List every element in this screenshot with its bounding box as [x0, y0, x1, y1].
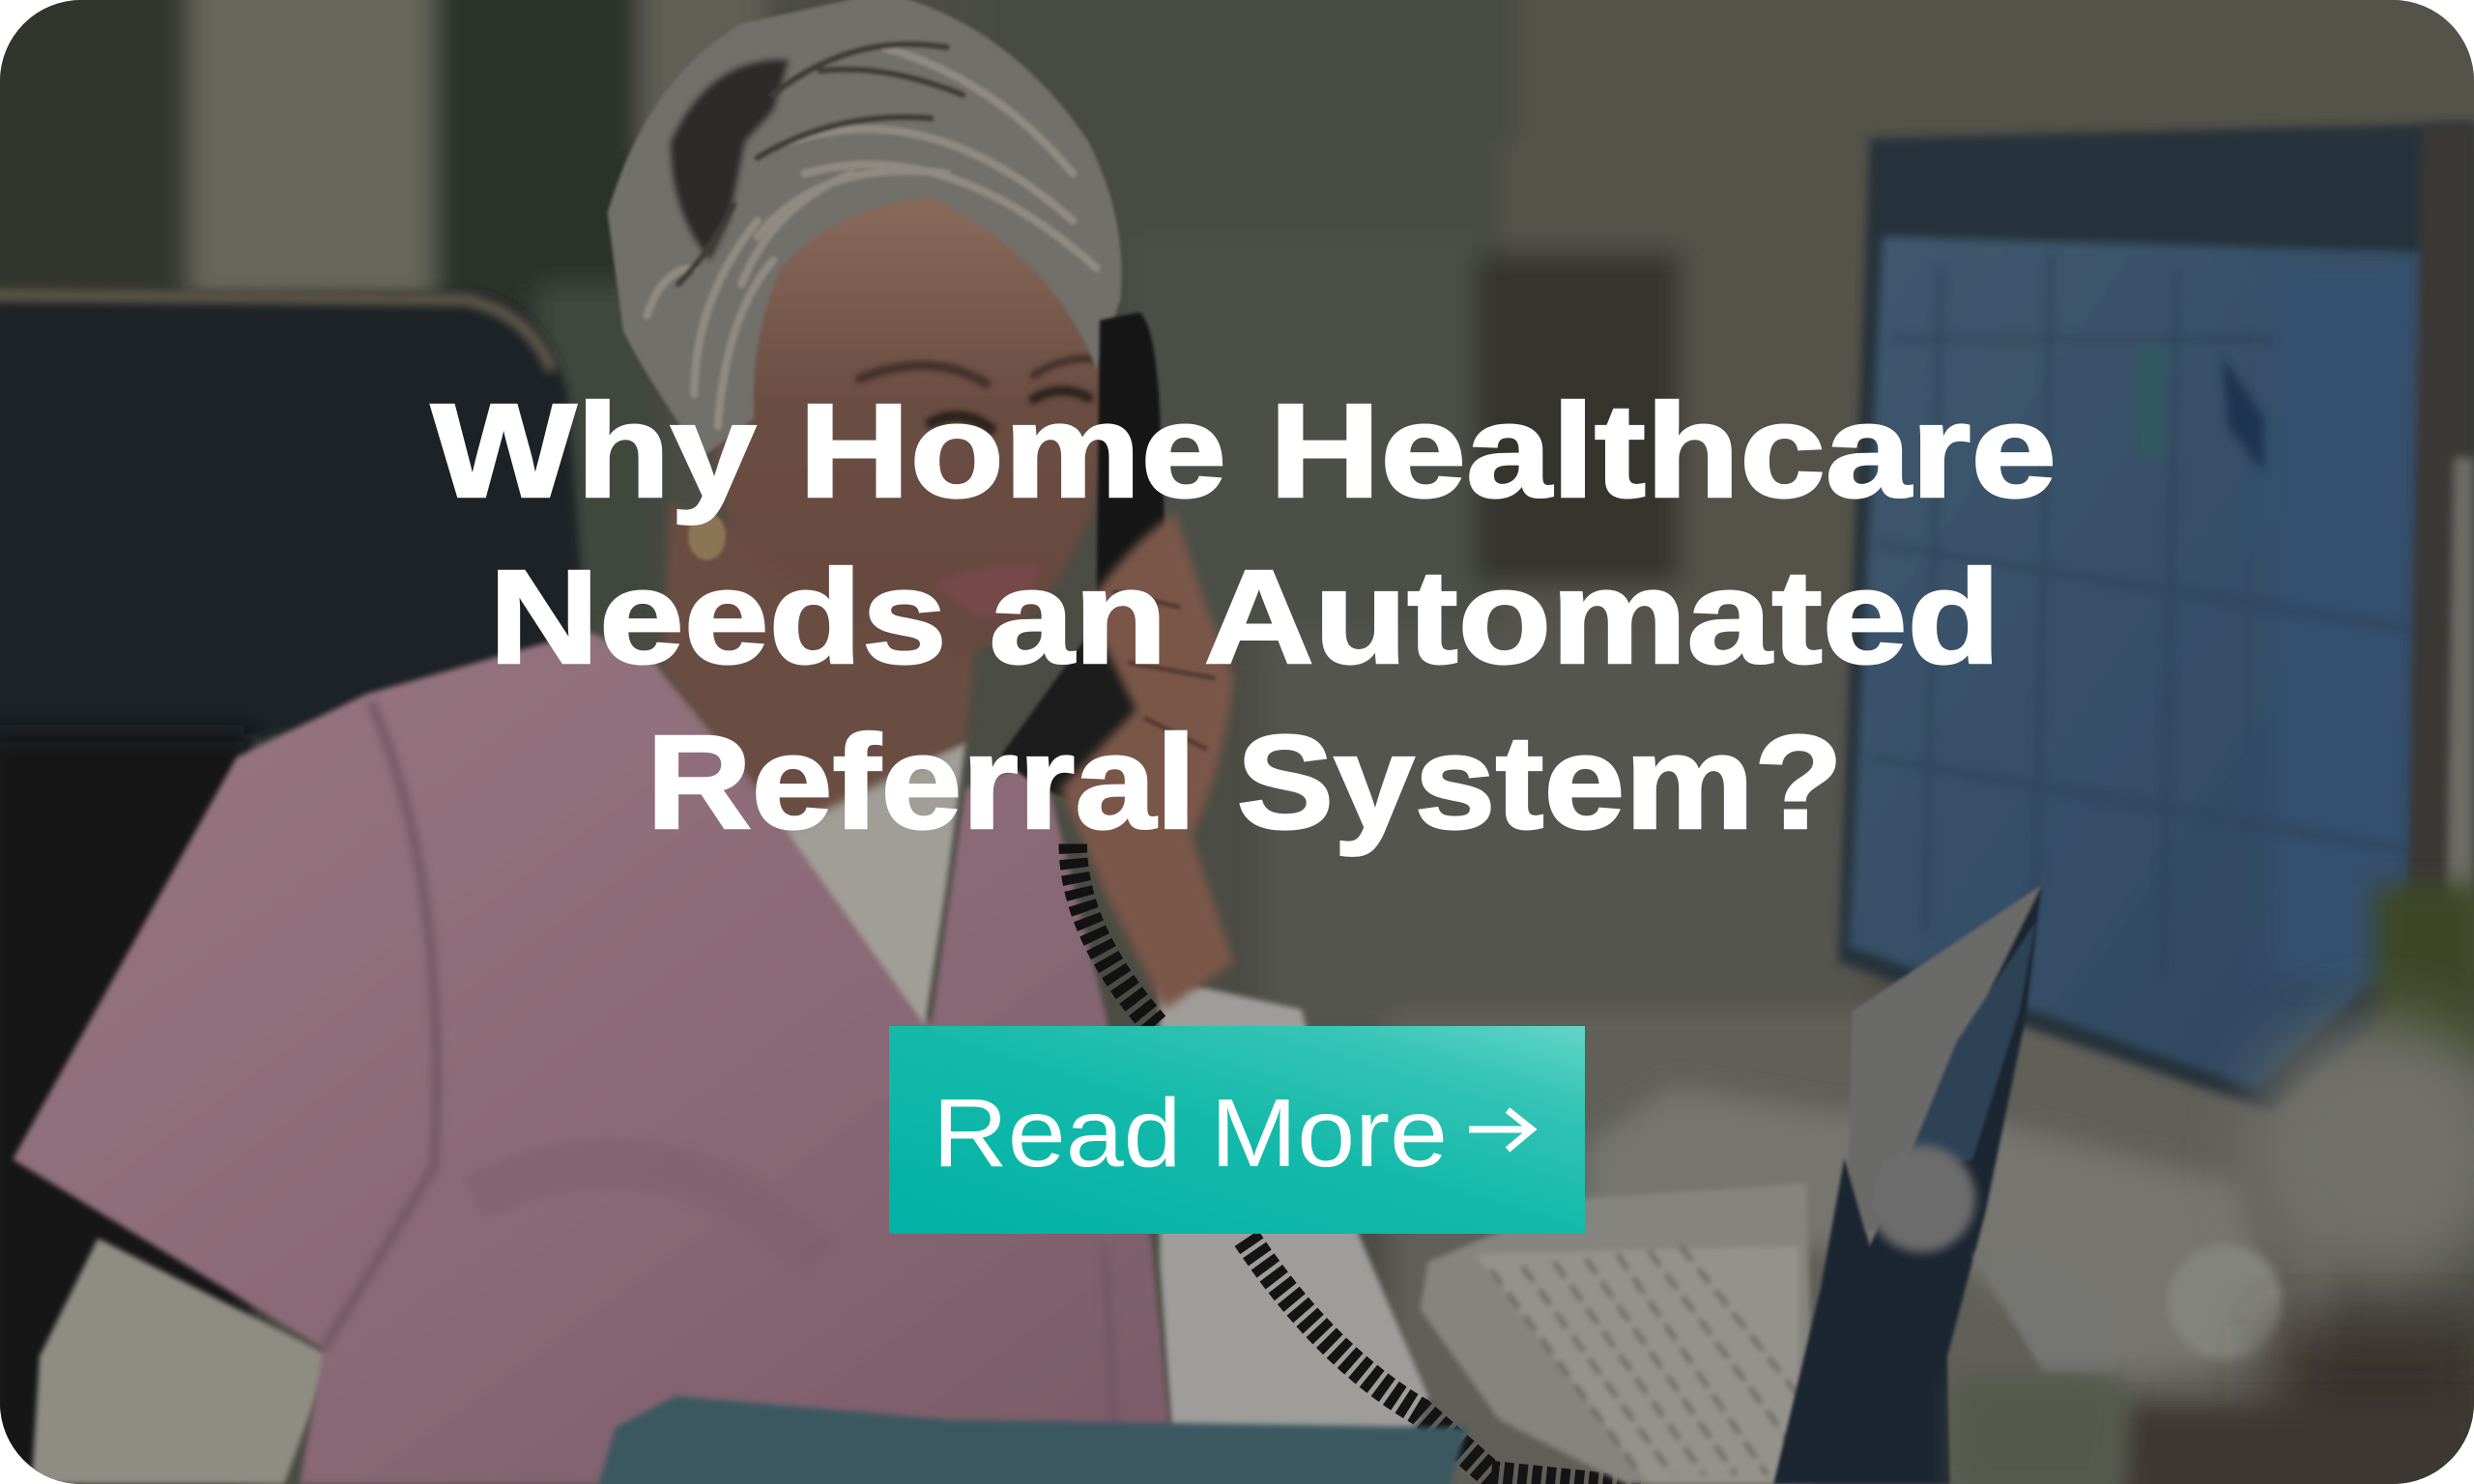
button: read more — [889, 1026, 1585, 1234]
keyboard — [1420, 1184, 1815, 1484]
nurse: hair — [608, 0, 1122, 457]
laptop — [1773, 885, 2042, 1484]
nurse: neck — [663, 504, 978, 828]
title — [431, 377, 2057, 857]
telephone handset — [1002, 312, 1175, 805]
nurse: white sleeve right — [1156, 985, 1430, 1430]
scrubs shading — [322, 699, 1107, 1349]
title: Referral System? — [647, 708, 1843, 857]
office chair — [0, 294, 587, 1484]
coiled phone cord — [1073, 843, 1641, 1484]
title: Why Home Healthcare — [431, 377, 2057, 526]
nurse: face — [694, 189, 1105, 655]
paper on desk — [1578, 1085, 2280, 1381]
computer monitor — [1838, 123, 2474, 1112]
nurse: hand — [1060, 513, 1234, 1010]
nurse: undershirt neckline — [773, 741, 965, 1025]
nurse: earring — [688, 513, 726, 560]
nurse: undershirt sleeve left — [32, 1239, 331, 1484]
blurred plant and vase — [1957, 883, 2474, 1484]
nurse: mouth — [935, 565, 1038, 618]
nurse: eyebrows and eyes — [860, 358, 1097, 429]
title: Needs an Automated — [489, 543, 2000, 692]
nurse: scrubs top — [13, 631, 1175, 1484]
folder on desk — [596, 1396, 1467, 1484]
hand finger creases — [1112, 591, 1215, 750]
button label: Read More — [933, 1079, 1448, 1187]
computer mouse — [1972, 1249, 2117, 1372]
icon: arrow — [1469, 1110, 1532, 1150]
